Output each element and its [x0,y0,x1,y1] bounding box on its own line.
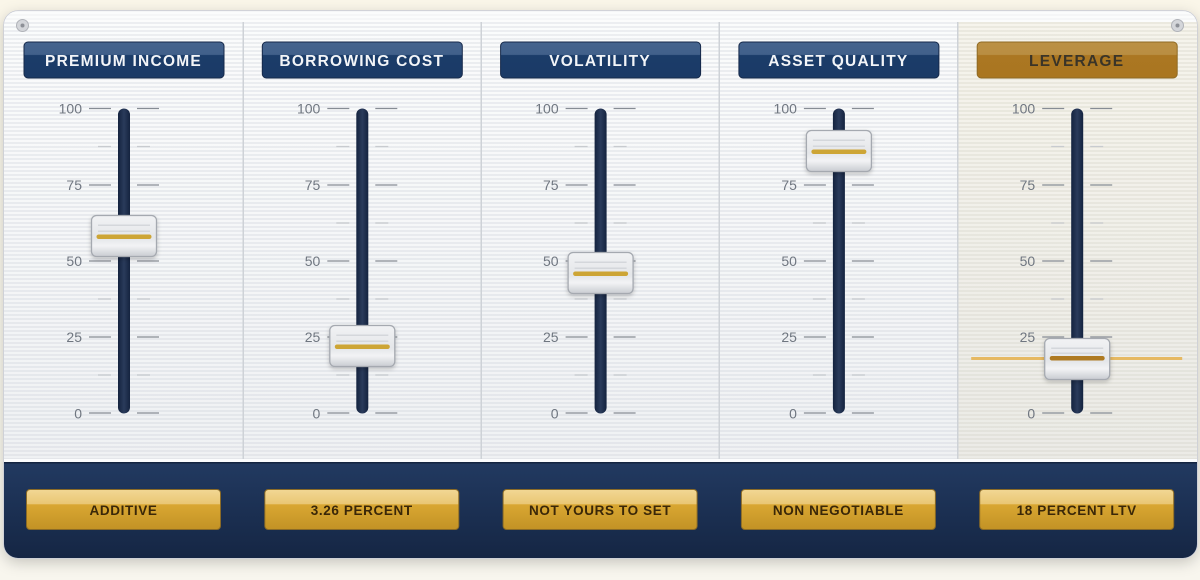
slider handle [568,252,633,294]
slider handle [806,130,871,172]
value button [741,490,935,530]
scale: 0 [74,406,82,422]
heading: borrowing cost: BORROWING COST [279,53,444,70]
scale [535,100,636,422]
slider handle [330,326,395,366]
scale: 100 [59,100,82,116]
value button [503,490,697,530]
column: leverage [971,42,1182,530]
column: volatility [501,42,701,530]
scale: 0 [551,406,559,422]
value button: NON NEGOTIABLE [773,503,904,518]
scale: 50 [781,253,797,269]
level line [971,357,1182,360]
scale: 50 [1020,253,1035,269]
heading: asset quality: ASSET QUALITY [768,53,909,70]
value button: 18 PERCENT LTV [1017,503,1137,518]
bottom dock [4,462,1197,558]
heading: leverage: LEVERAGE [1029,53,1124,70]
value button [26,490,220,530]
slider track [595,108,607,414]
scale: 25 [305,329,321,345]
scale: 75 [781,177,797,193]
scale [297,100,397,422]
scale: 0 [313,406,321,422]
value button: NOT YOURS TO SET [529,503,671,518]
column: premium income [24,42,224,530]
heading: borrowing cost [262,42,462,78]
value button [980,490,1174,530]
scale: 0 [1027,406,1035,422]
scale: 75 [66,177,82,193]
scale: 25 [1020,329,1035,345]
slider track [118,108,130,414]
icon: left screw [16,20,28,32]
scale: 100 [297,100,321,116]
slider handle [1045,338,1110,380]
scale: 100 [535,100,559,116]
scale [774,100,874,422]
scale: 25 [781,329,797,345]
scale [1012,100,1112,422]
slider handle [92,216,156,256]
scale: 25 [66,329,82,345]
heading: asset quality [739,42,939,78]
scale: 50 [543,253,559,269]
scale: 0 [789,406,797,422]
heading: premium income [24,42,224,78]
slider track [833,108,845,414]
value button: 3.26 PERCENT [311,503,413,518]
scale: 75 [543,177,559,193]
scale: 50 [66,253,82,269]
heading: volatility: VOLATILITY [549,53,651,70]
heading: premium income: PREMIUM INCOME [45,53,202,70]
scale: 75 [1020,177,1035,193]
scale [59,100,159,422]
value button: ADDITIVE [90,503,157,518]
slider track [1071,108,1083,414]
slider track [356,108,368,414]
heading: volatility [501,42,701,78]
column: asset quality [739,42,939,530]
scale: 100 [774,100,797,116]
scale: 50 [305,253,321,269]
icon: right screw [1172,20,1184,32]
heading: leverage [977,42,1177,78]
column: borrowing cost [262,42,462,530]
scale: 100 [1012,100,1035,116]
scale: 75 [305,177,321,193]
value button [265,490,459,530]
scale: 25 [543,329,559,345]
